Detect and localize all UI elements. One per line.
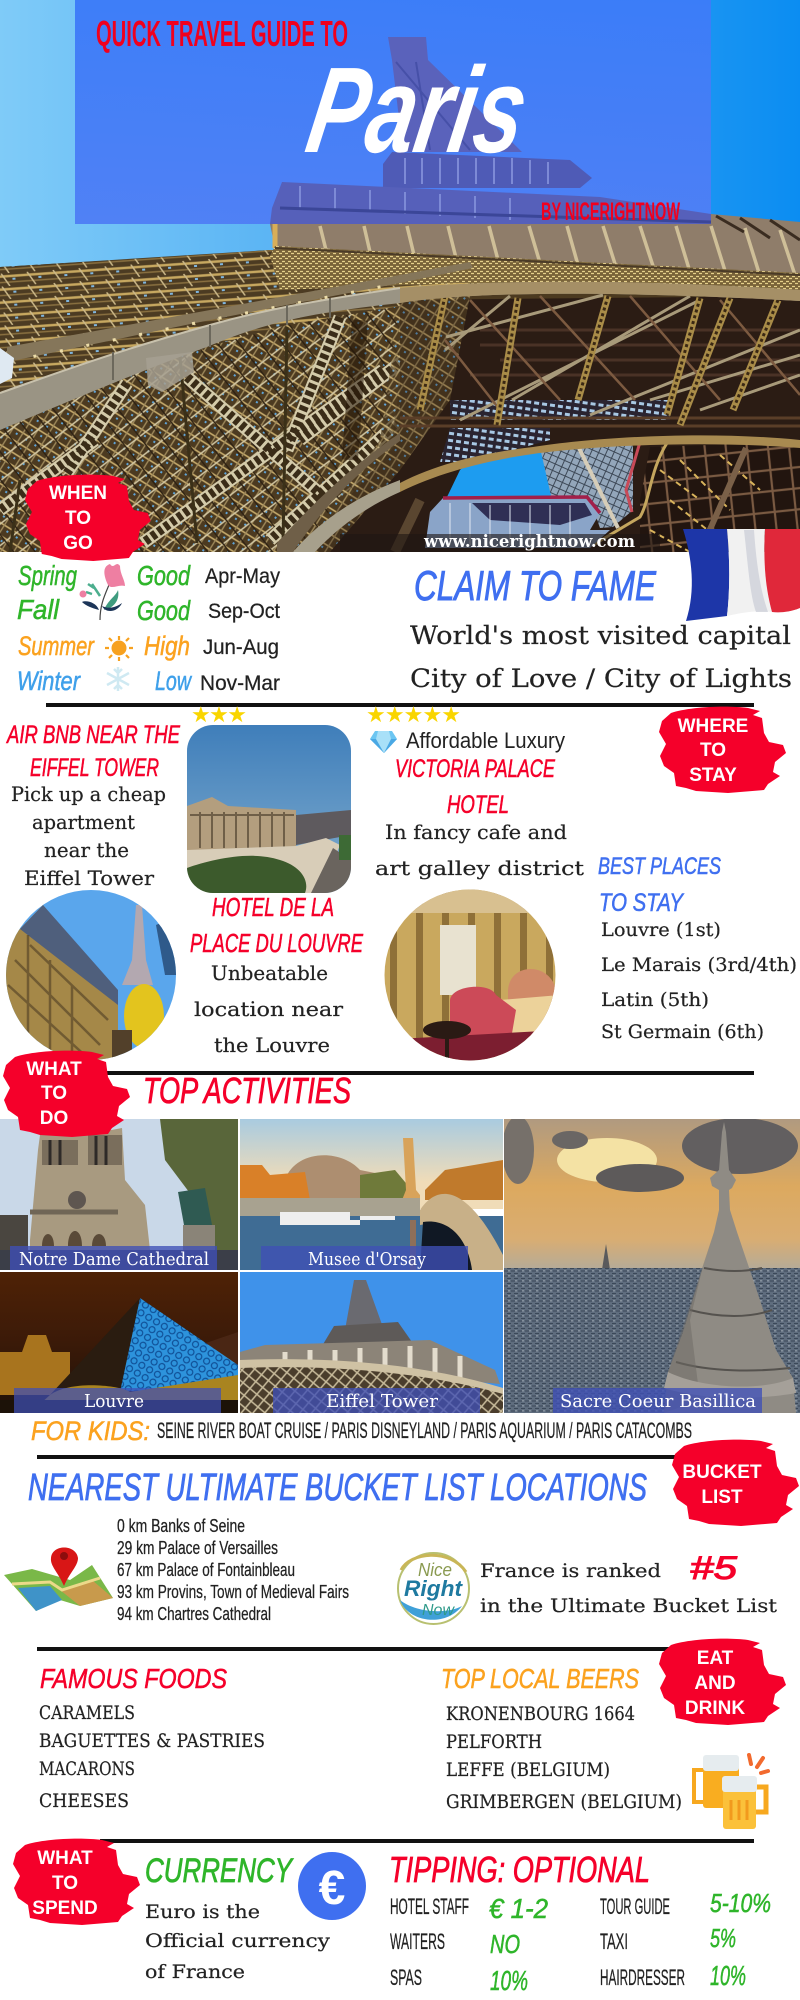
badge: where to stay: TO xyxy=(700,740,726,761)
text: in the list: in the Ultimate Bucket List xyxy=(480,1595,777,1617)
top local beers xyxy=(441,1663,682,1813)
section: top activities xyxy=(0,1051,800,1413)
top local beers: KRONENBOURG 1664 xyxy=(446,1703,635,1725)
lattice girders xyxy=(0,314,400,552)
badge: what to do: WHAT xyxy=(26,1059,82,1080)
light diagonal members xyxy=(445,295,800,420)
logo: Nice Right Now xyxy=(398,1553,469,1624)
best places to stay: St Germain (6th) xyxy=(601,1021,764,1043)
tipping table: € 1-2 xyxy=(489,1893,548,1924)
big curved arch beam xyxy=(0,282,800,430)
stars: three: ★★★ xyxy=(191,703,247,728)
row: fall: Fall xyxy=(17,594,60,625)
row: summer xyxy=(18,631,279,661)
tipping table: SPAS xyxy=(390,1965,422,1990)
tipping table: 5-10% xyxy=(710,1888,771,1918)
badge: when to go: GO xyxy=(63,533,93,554)
hotel: de la place du louvre: the Louvre xyxy=(214,1033,330,1057)
label: Eiffel Tower xyxy=(273,1388,480,1413)
row: summer: Jun-Aug xyxy=(203,636,279,659)
brown under-deck ribs xyxy=(470,330,800,375)
best places to stay: Louvre (1st) xyxy=(601,919,721,941)
tipping table: HAIRDRESSER xyxy=(600,1965,685,1990)
badge: when to go: WHEN xyxy=(49,483,107,504)
fact: City of Love / City of Lights xyxy=(410,664,792,693)
title panel xyxy=(75,0,711,226)
row: spring xyxy=(18,560,280,591)
icon: euro: € xyxy=(319,1862,345,1915)
tipping table: WAITERS xyxy=(390,1929,445,1954)
for kids: FOR KIDS: xyxy=(31,1416,150,1446)
badge: what to spend: WHAT xyxy=(37,1848,93,1869)
photo: hotel room xyxy=(380,885,560,1065)
currency note: Official currency xyxy=(145,1930,330,1952)
gold vertical columns xyxy=(420,296,778,425)
top local beers: PELFORTH xyxy=(446,1731,542,1753)
hotel: air bnb: near the xyxy=(44,838,129,862)
heading: claim to fame: CLAIM TO FAME xyxy=(414,562,657,609)
famous foods: MACARONS xyxy=(39,1758,135,1780)
photo card: Musee d'Orsay xyxy=(240,1119,503,1270)
hotel: victoria palace: In fancy cafe and xyxy=(385,820,567,844)
best places to stay xyxy=(598,853,797,1043)
tipping table: NO xyxy=(490,1929,520,1959)
section: what to spend xyxy=(13,1839,771,1996)
best places to stay: Le Marais (3rd/4th) xyxy=(601,954,797,976)
famous foods: CARAMELS xyxy=(39,1702,135,1724)
badge: where to stay: STAY xyxy=(689,765,737,786)
icon: beer mugs xyxy=(694,1755,768,1829)
hotel: air bnb: Pick up a cheap xyxy=(11,782,166,806)
hotel: air bnb xyxy=(6,721,180,890)
tipping table: 10% xyxy=(490,1965,528,1996)
heading: currency: CURRENCY xyxy=(145,1852,294,1890)
badge: where to stay: WHERE xyxy=(678,716,748,737)
red-framed glass canopy xyxy=(425,497,610,548)
for kids xyxy=(31,1416,692,1446)
hotel: de la place du louvre: Unbeatable xyxy=(211,961,328,985)
row: winter: Nov-Mar xyxy=(200,672,280,695)
row: winter: Low xyxy=(155,666,192,696)
heading: Paris: Paris xyxy=(298,43,537,179)
badge: bucket list: BUCKET xyxy=(682,1462,762,1483)
lower arch beam xyxy=(400,435,800,492)
badge: what to spend xyxy=(13,1839,140,1925)
badge: eat and drink: DRINK xyxy=(685,1698,745,1719)
website url: www.nicerightnow.com xyxy=(423,532,635,552)
row: summer: High xyxy=(144,631,190,661)
fact: World's most visited capital xyxy=(410,621,791,650)
section: claim to fame xyxy=(410,562,792,693)
badge: bucket list: LIST xyxy=(701,1487,743,1508)
best places to stay: BEST PLACES xyxy=(598,853,721,880)
section: bucket list xyxy=(4,1440,799,1624)
photo card: Eiffel Tower xyxy=(240,1272,503,1413)
hotel: victoria palace: art galley district xyxy=(375,856,584,880)
best places to stay: TO STAY xyxy=(599,889,685,917)
row: spring: Good xyxy=(137,560,191,591)
hotel: de la place du louvre: HOTEL DE LA xyxy=(212,892,334,922)
row: fall: Sep-Oct xyxy=(208,600,280,623)
row: winter: Winter xyxy=(17,666,81,696)
row: summer: Summer xyxy=(18,631,95,661)
row: spring: Spring xyxy=(18,560,77,591)
section: where to stay xyxy=(0,703,797,1065)
hotel: de la place du louvre: PLACE DU LOUVRE xyxy=(190,928,363,958)
best places to stay: Latin (5th) xyxy=(601,989,709,1011)
arch opening: sky and tower leg xyxy=(447,450,553,497)
icon: euro xyxy=(298,1852,366,1920)
lower left lattice xyxy=(0,296,470,552)
tipping table: 5% xyxy=(710,1923,736,1953)
tower deck xyxy=(270,214,800,293)
tipping table xyxy=(390,1888,771,1996)
label: Musee d'Orsay xyxy=(261,1246,468,1270)
badge: bucket list xyxy=(672,1440,799,1526)
currency note: of France xyxy=(145,1961,245,1983)
list: distances: 67 km Palace of Fontainbleau xyxy=(117,1560,295,1580)
row: fall xyxy=(17,594,280,626)
label: Louvre xyxy=(14,1388,221,1413)
top local beers: GRIMBERGEN (BELGIUM) xyxy=(446,1791,682,1813)
photo card: Notre Dame xyxy=(0,1119,238,1270)
camera on the beam xyxy=(0,348,14,384)
hotel: air bnb: Eiffel Tower xyxy=(24,866,154,890)
currency note xyxy=(145,1901,330,1983)
tipping table: 10% xyxy=(710,1960,746,1991)
logo: Nice Right Now: Nice xyxy=(418,1560,452,1580)
badge: eat and drink xyxy=(659,1639,786,1725)
heading: Quick travel guide to: QUICK TRAVEL GUIDE TO xyxy=(96,13,348,54)
top local beers: LEFFE (BELGIUM) xyxy=(446,1759,610,1781)
heading: top activities: TOP ACTIVITIES xyxy=(143,1070,351,1111)
tipping table: HOTEL STAFF xyxy=(390,1894,469,1919)
currency note: Euro is the xyxy=(145,1901,260,1923)
icon: map pin xyxy=(4,1548,113,1611)
section: eat and drink xyxy=(39,1639,786,1829)
photo card: Sacre Coeur xyxy=(502,1116,800,1413)
tipping table: TAXI xyxy=(600,1929,628,1954)
icon: sun xyxy=(105,636,133,661)
logo: Nice Right Now: Right xyxy=(404,1576,464,1601)
hotel: de la place du louvre: location near xyxy=(194,997,343,1021)
badge: what to do xyxy=(3,1051,130,1137)
heading: tipping: TIPPING: OPTIONAL xyxy=(389,1849,650,1890)
hotel: air bnb: apartment xyxy=(32,810,135,834)
hero photo: Eiffel Tower from below xyxy=(0,0,800,552)
lower right brown grid xyxy=(640,442,800,552)
upper lattice band xyxy=(0,250,470,388)
hotel: victoria palace xyxy=(375,755,584,880)
hotel: air bnb: EIFFEL TOWER xyxy=(30,754,159,782)
section: when to go seasons xyxy=(17,560,280,696)
badge: eat and drink: EAT xyxy=(697,1648,734,1669)
row: spring: Apr-May xyxy=(205,565,280,588)
badge: what to do: DO xyxy=(40,1108,68,1129)
hotel: de la place du louvre xyxy=(190,892,363,1057)
badge: where to stay xyxy=(659,707,786,793)
list: distances: 93 km Provins, Town of Medieval Fairs xyxy=(117,1582,349,1602)
label: Louvre: Louvre xyxy=(84,1391,144,1412)
label: Sacre Coeur: Sacre Coeur Basillica xyxy=(560,1391,756,1412)
badge: what to do: TO xyxy=(41,1083,67,1104)
top local beers: TOP LOCAL BEERS xyxy=(441,1663,639,1694)
badge: what to spend: SPEND xyxy=(32,1898,98,1919)
list: distances: 0 km Banks of Seine xyxy=(117,1516,245,1536)
icon: flower xyxy=(80,564,125,620)
label: affordable luxury: Affordable Luxury xyxy=(406,728,565,753)
logo: Nice Right Now: Now xyxy=(422,1602,455,1619)
photo: Louvre courtyard xyxy=(187,725,351,893)
famous foods: BAGUETTES & PASTRIES xyxy=(39,1730,265,1752)
famous foods xyxy=(39,1663,265,1812)
label: Notre Dame: Notre Dame Cathedral xyxy=(19,1249,209,1270)
badge: eat and drink: AND xyxy=(694,1673,736,1694)
structure base under the lattice xyxy=(0,250,714,430)
photo card: Louvre pyramid xyxy=(0,1272,238,1413)
famous foods: CHEESES xyxy=(39,1790,129,1812)
hotel: victoria palace: HOTEL xyxy=(447,791,509,819)
hotel: air bnb: AIR BNB NEAR THE xyxy=(6,721,180,749)
badge: when to go: TO xyxy=(65,508,91,529)
list: distances xyxy=(117,1516,349,1624)
icon: diamond xyxy=(370,731,397,753)
thin rail above the main beam xyxy=(7,262,473,362)
badge: when to go xyxy=(25,475,151,561)
stars: five: ★★★★★ xyxy=(366,703,461,728)
label: Musee d'Orsay: Musee d'Orsay xyxy=(308,1249,427,1270)
icon: snowflake xyxy=(107,667,129,691)
famous foods: FAMOUS FOODS xyxy=(40,1663,227,1694)
rank: #5 xyxy=(690,1550,737,1586)
tipping table: TOUR GUIDE xyxy=(600,1894,670,1919)
glass strips xyxy=(400,400,800,462)
icon: French flag xyxy=(683,529,800,621)
row: winter xyxy=(17,666,280,696)
label: Eiffel Tower: Eiffel Tower xyxy=(326,1391,438,1412)
list: distances: 29 km Palace of Versailles xyxy=(117,1538,278,1558)
hotel: victoria palace: VICTORIA PALACE xyxy=(395,755,555,783)
photo: street with Eiffel Tower xyxy=(6,890,176,1060)
row: fall: Good xyxy=(137,595,191,626)
badge: what to spend: TO xyxy=(52,1873,78,1894)
list: distances: 94 km Chartres Cathedral xyxy=(117,1604,271,1624)
byline: BY NICERIGHTNOW xyxy=(541,198,680,226)
dark under-deck with X-bracing xyxy=(300,296,800,552)
text: France is ranked: France is ranked xyxy=(480,1560,661,1582)
tower silhouette xyxy=(270,37,711,224)
